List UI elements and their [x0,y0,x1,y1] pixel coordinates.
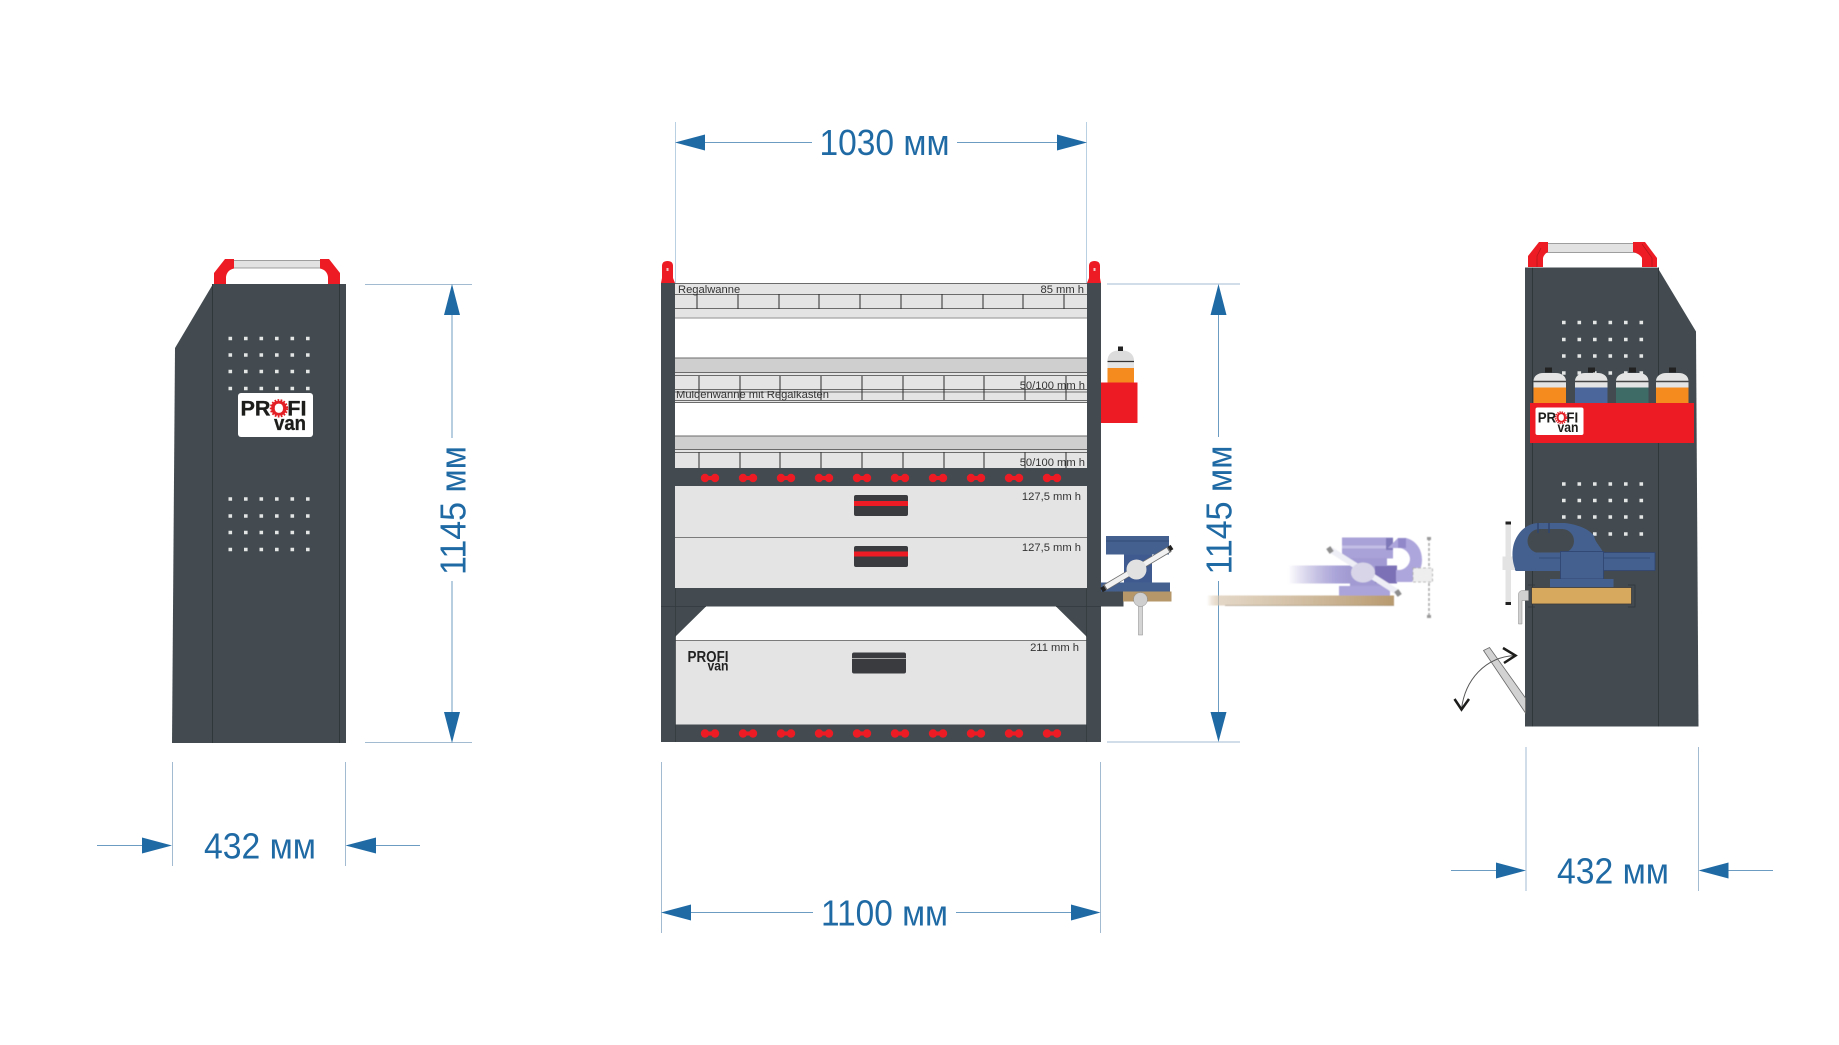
vise on front view [1101,536,1172,635]
fold-down flap [1484,648,1526,713]
can blue [1575,368,1608,403]
shelf 2: Muldenwanne mit Regalkasten [675,358,1087,402]
spray cans [1534,368,1688,403]
carrying handle [214,259,340,284]
drawer 2: 127,5 mm h [1022,542,1081,554]
spray can holder on front view [1101,346,1138,423]
ventilation holes [228,338,311,550]
frame posts [661,283,675,742]
ghost handle and hub [1326,546,1402,597]
drawer 1 [675,486,1087,538]
can teal [1616,368,1648,403]
red post caps [661,261,1101,283]
dimension: right depth 432 mm: 432 мм [1557,850,1669,892]
shelf 1: Regalwanne: Regalwanne [678,284,740,296]
shelf 2: Muldenwanne mit Regalkasten: Muldenwanne mit Regalkasten [676,389,829,401]
bottom drawer [675,640,1087,724]
swing arrow [1454,648,1516,710]
red can holder with logo: van [1558,419,1578,435]
lower rail with red clips [675,724,1087,742]
crossbar with corner gussets [675,588,1087,637]
dimension: inner width 1030 mm [675,122,1087,283]
drawer 2 [675,538,1087,588]
logo: PROFI van: van [274,413,306,435]
logo: PROFI van: PROFI [240,398,306,420]
carrying handle [1528,242,1657,267]
upper rail with red clips [675,468,1087,486]
ghost vise: swing-out position [1207,537,1432,618]
side panel body [172,284,346,743]
drawer 1: 127,5 mm h [1022,491,1081,503]
shelf 1: Regalwanne [675,284,1087,318]
red can holder with logo: PROFI [1538,411,1578,427]
panel: right side view [1454,242,1698,726]
dimension: left height 1145 mm [365,284,474,743]
panel: front view shelving unit [661,261,1101,742]
panel: left side view [172,259,346,743]
dimension: inner width 1030 mm: 1030 мм [820,122,950,163]
bottom drawer: van [708,658,728,674]
bottom drawer: PROFI [688,649,728,666]
dimension: outer width 1100 mm: 1100 мм [821,892,948,934]
vise mounted on side [1502,522,1655,624]
ghost jaw and body [1339,538,1422,596]
dimension: left depth 432 mm [97,762,420,866]
can orange right [1656,368,1688,403]
dimension: outer width 1100 mm [661,762,1100,934]
shelf 3: 50/100 mm h [1020,457,1085,469]
ventilation holes [1562,322,1644,534]
dimension: left depth 432 mm: 432 мм [204,826,316,866]
red can holder with logo [1530,403,1694,443]
logo: PROFI van [238,393,313,437]
dimension: right depth 432 mm [1451,747,1773,892]
can orange [1534,368,1566,403]
dimension: right height 1145 mm [1107,284,1240,742]
shelf 2: Muldenwanne mit Regalkasten: 50/100 mm h [1020,380,1085,392]
shelf 3 [675,436,1087,469]
shelf 1: Regalwanne: 85 mm h [1040,284,1084,296]
side panel body [1525,268,1698,726]
wood board fading [1207,596,1394,606]
dimension: left height 1145 mm: 1145 мм [432,446,474,575]
ghost rod and block, dashed [1413,537,1432,618]
sliding beam fading [1288,566,1397,584]
dimension: right height 1145 mm: 1145 мм [1198,446,1240,574]
bottom drawer: 211 mm h [1030,642,1079,654]
